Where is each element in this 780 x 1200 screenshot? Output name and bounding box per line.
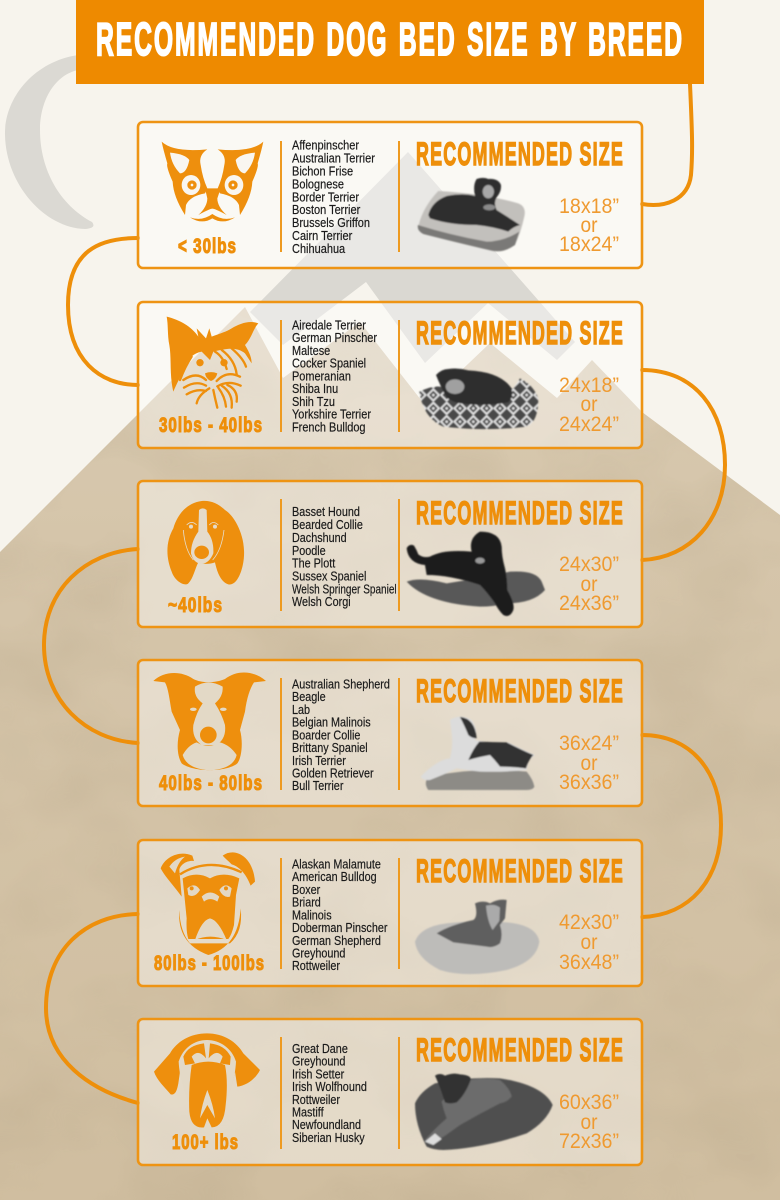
breed list: Newfoundland — [292, 1119, 361, 1132]
breed list: Greyhound — [292, 947, 345, 961]
heading: RECOMMENDED SIZE — [416, 495, 624, 531]
breed list: Boxer — [292, 883, 320, 897]
heading: RECOMMENDED SIZE — [416, 136, 624, 172]
heading: RECOMMENDED SIZE — [416, 1032, 624, 1068]
breed list: Boarder Collie — [292, 729, 360, 743]
panel: about 40 lbs — [138, 481, 642, 627]
breed list: Affenpinscher — [292, 139, 359, 153]
photo: dog on patterned bed — [419, 369, 538, 429]
breed list: Welsh Springer Spaniel — [292, 583, 397, 597]
crescent moon — [5, 55, 93, 229]
breed list — [292, 1042, 367, 1145]
icon: boxer — [161, 852, 255, 955]
breed list: Dachshund — [292, 531, 347, 545]
photo: dog on pillow bed — [418, 178, 525, 251]
breed list: Siberian Husky — [292, 1131, 365, 1145]
icon: basset hound — [167, 501, 244, 584]
photo: black dog on cushion — [407, 532, 545, 616]
breed list: Shih Tzu — [292, 395, 335, 409]
breed list: Irish Setter — [292, 1068, 344, 1082]
grey mountain chevron — [250, 152, 575, 363]
breed list: Irish Wolfhound — [292, 1080, 367, 1094]
breed list: Boston Terrier — [292, 204, 360, 217]
breed list — [292, 506, 397, 609]
connector lines — [44, 84, 725, 1103]
sizes: or — [580, 213, 598, 237]
breed list: Briard — [292, 896, 321, 910]
sizes: 24x24” — [559, 412, 619, 436]
panel: over 100 lbs — [138, 1019, 642, 1165]
breed list: German Pinscher — [292, 332, 377, 345]
breed list — [292, 678, 390, 793]
breed list: Cairn Terrier — [292, 229, 352, 243]
sizes: or — [580, 392, 598, 416]
sizes — [559, 910, 619, 974]
breed list: Malinois — [292, 909, 332, 923]
breed list: Welsh Corgi — [292, 596, 351, 609]
breed list: Pomeranian — [292, 370, 351, 384]
breed list: German Shepherd — [292, 934, 381, 948]
icon: yorkshire terrier — [167, 317, 258, 408]
breed list: Sussex Spaniel — [292, 570, 366, 584]
breed list: Bolognese — [292, 178, 344, 192]
breed list: Maltese — [292, 344, 330, 358]
breed list: Greyhound — [292, 1055, 345, 1069]
sizes: 36x36” — [559, 770, 619, 794]
weight label: 30lbs - 40lbs — [159, 414, 263, 437]
heading: RECOMMENDED SIZE — [416, 315, 624, 351]
weight label: ~40lbs — [168, 594, 223, 617]
breed list: French Bulldog — [292, 421, 366, 435]
sizes: 18x24” — [559, 232, 619, 256]
heading: RECOMMENDED SIZE — [416, 853, 624, 889]
sizes: or — [580, 751, 598, 775]
breed list: Yorkshire Terrier — [292, 408, 371, 422]
sizes — [559, 373, 619, 436]
breed list: Doberman Pinscher — [292, 921, 388, 935]
breed list: Rottweiler — [292, 1093, 340, 1107]
sizes — [559, 731, 619, 794]
weight label: < 30lbs — [178, 235, 237, 258]
breed list: Brussels Griffon — [292, 216, 370, 230]
sizes: or — [580, 930, 598, 954]
title banner — [76, 0, 704, 84]
breed list: Belgian Malinois — [292, 716, 371, 730]
breed list: Chihuahua — [292, 242, 346, 256]
icon: boston terrier — [162, 142, 263, 221]
sizes: or — [580, 572, 598, 596]
photo: spaniel on flat cushion — [421, 717, 535, 790]
sizes: 42x30” — [559, 910, 619, 934]
sizes: 24x36” — [559, 591, 619, 615]
sizes: 36x24” — [559, 731, 619, 755]
breed list: The Plott — [292, 557, 336, 571]
sizes: or — [580, 1110, 598, 1134]
breed list: Bull Terrier — [292, 780, 344, 793]
weight label: 80lbs - 100lbs — [154, 952, 265, 975]
panel: 40 to 80 lbs — [138, 660, 642, 806]
breed list: Basset Hound — [292, 506, 360, 519]
sizes: 24x18” — [559, 373, 619, 397]
sizes: 18x18” — [559, 194, 619, 218]
breed list: Australian Shepherd — [292, 678, 390, 692]
panel: 80 to 100 lbs — [138, 840, 642, 986]
weight label: 40lbs - 80lbs — [159, 772, 263, 795]
breed list: Mastiff — [292, 1106, 324, 1120]
breed list: Golden Retriever — [292, 767, 374, 781]
panel: under 30 lbs — [138, 122, 642, 268]
sizes: 24x30” — [559, 552, 619, 576]
breed list: Border Terrier — [292, 191, 359, 204]
breed list: Beagle — [292, 691, 326, 704]
sizes — [559, 552, 619, 615]
panel: 30 to 40 lbs — [138, 302, 642, 448]
breed list: Shiba Inu — [292, 383, 338, 396]
breed list: Poodle — [292, 544, 326, 558]
breed list: Bichon Frise — [292, 165, 354, 179]
breed list: Bearded Collie — [292, 518, 363, 532]
breed list: Alaskan Malamute — [292, 858, 381, 872]
breed list: Rottweiler — [292, 960, 340, 973]
breed list — [292, 139, 375, 256]
photo: boxer on large round bed — [415, 1074, 553, 1150]
breed list: Airedale Terrier — [292, 319, 366, 333]
breed list: Cocker Spaniel — [292, 357, 366, 371]
photo: boxer in donut bed — [415, 900, 539, 974]
breed list — [292, 858, 388, 973]
breed list: Australian Terrier — [292, 152, 375, 166]
sizes: 36x48” — [559, 950, 619, 974]
breed list: Great Dane — [292, 1042, 348, 1056]
breed list: Lab — [292, 703, 310, 717]
weight label: 100+ lbs — [172, 1131, 239, 1154]
heading: RECOMMENDED SIZE — [416, 673, 624, 709]
sizes — [559, 194, 619, 256]
sizes: 72x36” — [559, 1129, 619, 1153]
icon: mastiff — [154, 1033, 260, 1127]
tan mountain — [0, 307, 780, 1200]
icon: border collie — [153, 672, 266, 770]
sizes — [559, 1090, 619, 1153]
breed list: Irish Terrier — [292, 754, 346, 768]
breed list: American Bulldog — [292, 871, 377, 884]
breed list: Brittany Spaniel — [292, 741, 368, 755]
sizes: 60x36” — [559, 1090, 619, 1114]
breed list — [292, 319, 377, 435]
